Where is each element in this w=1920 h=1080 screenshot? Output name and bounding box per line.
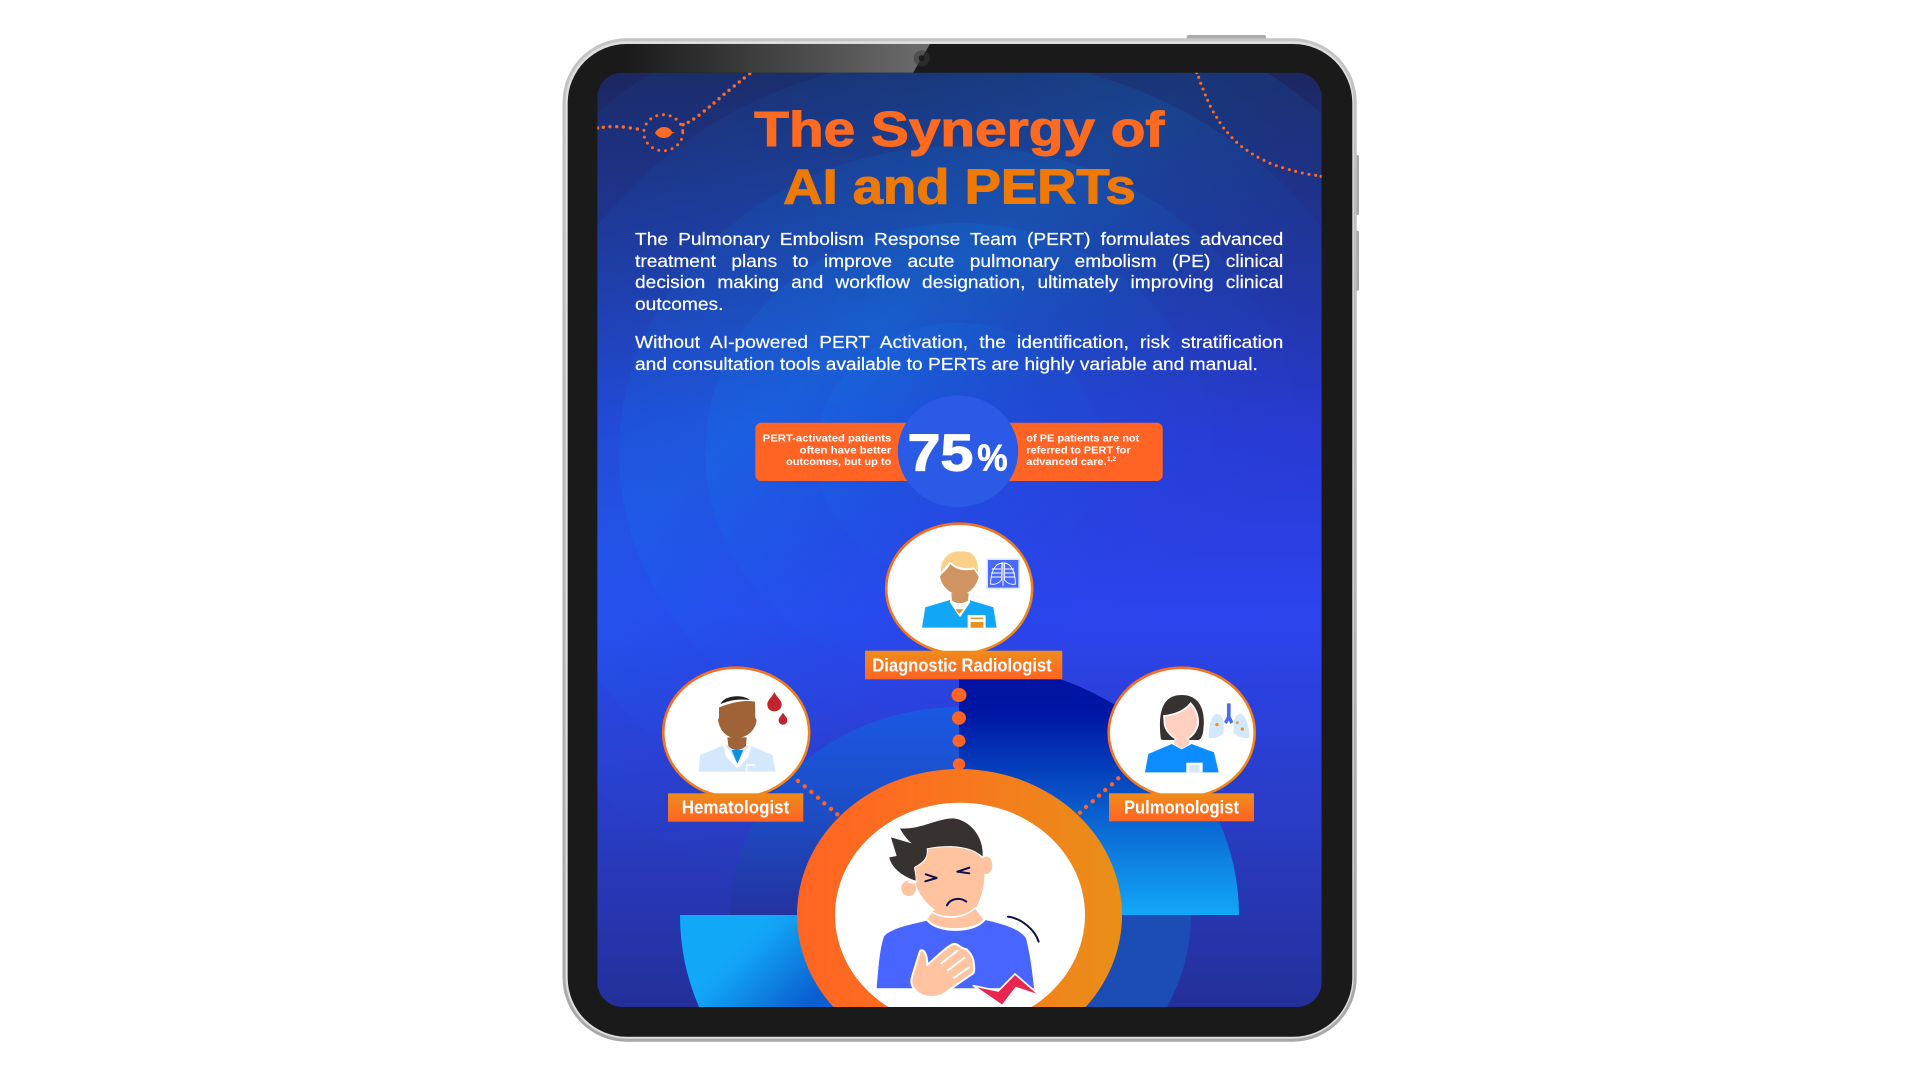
label: pulmonologist: Pulmonologist (1124, 797, 1239, 817)
patient ring (797, 769, 1122, 1007)
icon: blood drops (767, 692, 782, 711)
label: pulmonologist (1109, 793, 1254, 821)
title: AI and PERTs (783, 160, 1136, 214)
tablet side and top buttons (1187, 35, 1359, 291)
screen artwork (597, 72, 1322, 1007)
label: hematologist: Hematologist (682, 797, 789, 817)
banner left text: PERT-activated patients (763, 434, 892, 445)
icon: lungs (1209, 703, 1249, 738)
banner left text: often have better (800, 445, 891, 456)
bezel glare (625, 44, 930, 73)
connector dots: pulmonologist (1078, 776, 1121, 815)
banner left text (763, 434, 892, 468)
lower arcs backdrop (680, 662, 1239, 1007)
top-left dotted path (596, 72, 751, 151)
banner right text: advanced care. (1026, 457, 1107, 468)
statistic banner (755, 396, 1163, 507)
intro paragraph: outcomes. (635, 294, 723, 314)
panel: patient (797, 769, 1122, 1007)
icon: hematologist (699, 692, 787, 772)
icon: pulmonologist (1145, 695, 1249, 772)
concentric background rings (597, 72, 1321, 704)
camera (914, 50, 930, 66)
banner right text: of PE patients are not (1026, 434, 1140, 445)
tablet frame (562, 38, 1357, 1042)
tablet with infographic artwork (562, 35, 1359, 1042)
connector dots: radiologist to patient (952, 688, 966, 770)
top-right dotted arc (1195, 71, 1323, 178)
label: diagnostic radiologist: Diagnostic Radiologist (872, 656, 1052, 676)
icon: patient with chest pain (877, 818, 1040, 1006)
target ring (644, 115, 683, 151)
75 percent figure: % (977, 438, 1008, 479)
icon: radiologist (922, 551, 997, 628)
second paragraph: Without AI-powered PERT Activation, the identification, risk stratification (635, 332, 1283, 352)
infographic page (562, 35, 1359, 1042)
75 percent figure: 75 (908, 425, 973, 483)
intro paragraph: treatment plans to improve acute pulmonary embolism (PE) clinical (635, 251, 1283, 271)
75 percent figure (909, 434, 1008, 472)
banner right text (1026, 434, 1140, 465)
intro paragraph (635, 229, 1283, 314)
label: diagnostic radiologist (865, 651, 1062, 679)
second paragraph (635, 332, 1283, 374)
title (754, 110, 1166, 205)
connector dots: hematologist (796, 779, 840, 816)
intro paragraph: decision making and workflow designation, ultimately improving clinical (635, 272, 1283, 292)
panel: diagnostic radiologist (865, 524, 1062, 679)
banner left text: outcomes, but up to (786, 457, 891, 468)
target centre (655, 127, 675, 138)
panel: hematologist (663, 668, 809, 822)
second paragraph: and consultation tools available to PERTs are highly variable and manual. (635, 354, 1258, 374)
intro paragraph: The Pulmonary Embolism Response Team (PERT) formulates advanced (635, 229, 1283, 249)
banner right text: 1,2 (1107, 457, 1117, 463)
icon: lung x-ray (986, 558, 1020, 589)
title: The Synergy of (754, 103, 1165, 157)
screen background (597, 73, 1322, 1007)
label: hematologist (668, 793, 803, 822)
bubble (898, 396, 1018, 507)
banner right text: referred to PERT for (1026, 445, 1131, 456)
patient circle (835, 803, 1085, 1007)
panel: pulmonologist (1109, 668, 1255, 821)
